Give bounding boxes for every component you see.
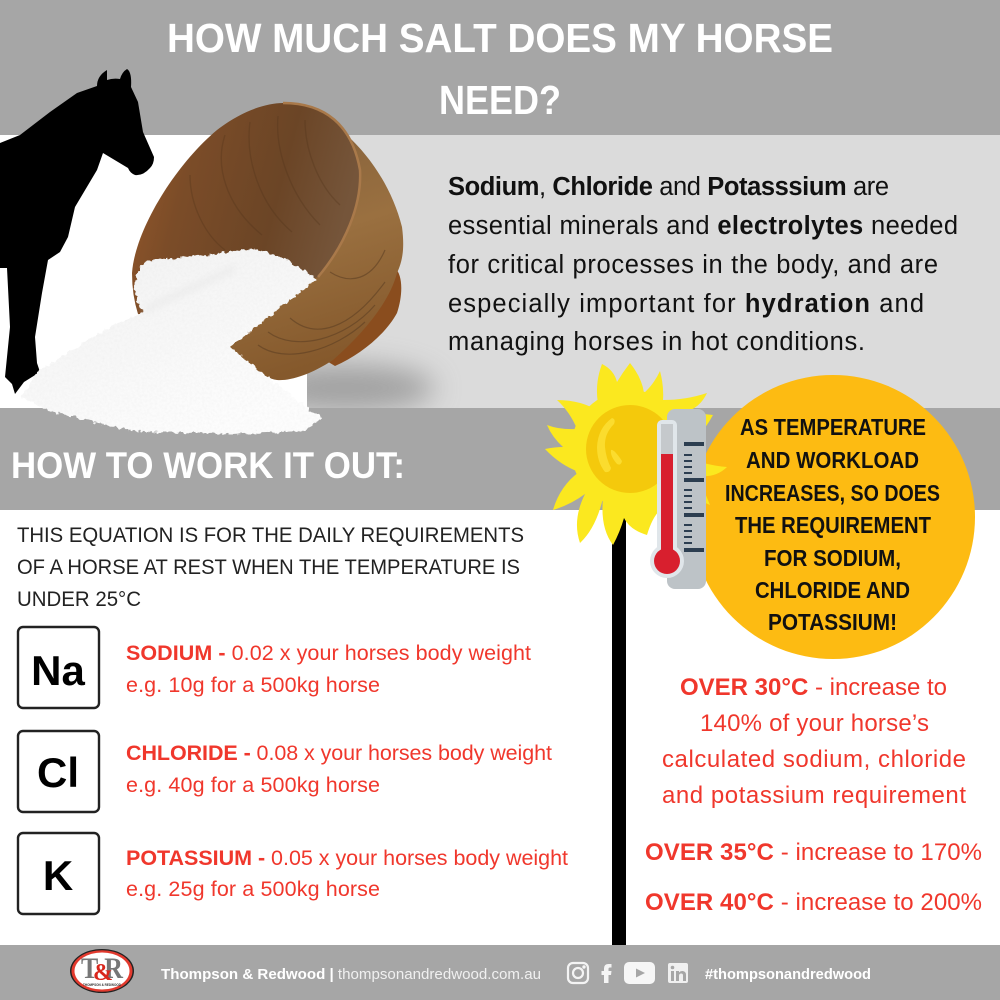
icon: linkedin: [668, 963, 688, 983]
title: HOW MUCH SALT DOES MY HORSE: [167, 15, 833, 61]
sun highlight: [597, 418, 622, 472]
icon: Cl tile: Cl: [37, 749, 79, 796]
footer hashtag: #thompsonandredwood: [705, 966, 871, 983]
thermometer scale: [684, 442, 704, 552]
title: [167, 15, 833, 123]
intro text: [448, 173, 958, 356]
icon: instagram: [568, 963, 588, 983]
temperature guidance text: [645, 674, 982, 916]
icon: Na tile: Na: [31, 647, 85, 694]
bowl interior: [132, 103, 360, 322]
intro text: especially important for hydration and: [448, 290, 924, 318]
intro panel white side: [0, 135, 307, 408]
icon: sun: [545, 363, 727, 545]
bowl rim highlight: [283, 103, 360, 277]
chloride text: CHLORIDE - 0.08 x your horses body weight: [126, 741, 552, 765]
icon: facebook: [602, 964, 612, 983]
intro text: essential minerals and electrolytes needed: [448, 212, 958, 240]
bowl shadow: [255, 364, 435, 412]
intro text: managing horses in hot conditions.: [448, 328, 865, 356]
footer band: [0, 945, 1000, 1000]
salt shading: [145, 268, 235, 310]
footer logo: [70, 949, 134, 993]
intro text: Sodium, Chloride and Potasssium are: [448, 173, 889, 201]
equation description: OF A HORSE AT REST WHEN THE TEMPERATURE IS: [17, 556, 520, 579]
chloride text: [126, 741, 552, 797]
divider line: [612, 510, 626, 945]
intro panel grey side: [307, 135, 1000, 408]
temperature guidance text: OVER 40°C - increase to 200%: [645, 889, 982, 916]
chloride text: e.g. 40g for a 500kg horse: [126, 773, 380, 797]
illustration: wooden bowl and salt: [20, 103, 403, 434]
intro text: for critical processes in the body, and are: [448, 251, 938, 279]
how to work it out band: [0, 408, 1000, 510]
icon: thermometer: [650, 409, 706, 589]
sodium text: SODIUM - 0.02 x your horses body weight: [126, 641, 531, 665]
temperature guidance text: OVER 30°C - increase to: [680, 674, 947, 701]
callout text: AND WORKLOAD: [746, 447, 919, 473]
icon: K tile: [18, 833, 99, 914]
heading: how to work it out: HOW TO WORK IT OUT:: [11, 445, 405, 486]
bowl interior grain: [190, 116, 340, 250]
bowl exterior grain: [258, 250, 385, 354]
callout text: INCREASES, SO DOES: [725, 480, 940, 506]
potassium text: [126, 846, 568, 901]
footer logo: T R: [81, 952, 123, 985]
potassium text: e.g. 25g for a 500kg horse: [126, 877, 380, 901]
temperature guidance text: calculated sodium, chloride: [662, 746, 966, 773]
equation description: UNDER 25°C: [17, 588, 141, 611]
temperature guidance text: OVER 35°C - increase to 170%: [645, 839, 982, 866]
sun disc: [586, 405, 674, 493]
callout text: CHLORIDE AND: [755, 577, 910, 603]
element: sodium: [18, 627, 531, 708]
callout circle: [691, 375, 975, 659]
bowl base: [325, 268, 401, 366]
footer logo: THOMPSON & REDWOOD: [83, 982, 121, 987]
icon: Na tile: [18, 627, 99, 708]
callout text: POTASSIUM!: [768, 609, 897, 635]
icon: Cl tile: [18, 731, 99, 812]
callout text: AS TEMPERATURE: [740, 414, 926, 440]
header band: [0, 0, 1000, 135]
equation description: [17, 524, 524, 611]
equation description: THIS EQUATION IS FOR THE DAILY REQUIREMENTS: [17, 524, 524, 547]
callout text: THE REQUIREMENT: [735, 512, 931, 538]
bowl exterior: [230, 103, 403, 380]
icon: horse silhouette: [0, 69, 154, 394]
callout text: [725, 414, 940, 635]
footer brand text: Thompson & Redwood | thompsonandredwood.com.au: [161, 966, 541, 983]
potassium text: POTASSIUM - 0.05 x your horses body weight: [126, 846, 568, 870]
callout text: FOR SODIUM,: [764, 545, 901, 571]
title: NEED?: [439, 77, 561, 123]
sodium text: e.g. 10g for a 500kg horse: [126, 673, 380, 697]
salt pile: [20, 249, 322, 434]
footer logo: &: [93, 960, 113, 986]
temperature guidance text: and potassium requirement: [662, 782, 966, 809]
element: chloride: [18, 731, 552, 812]
icon: youtube: [624, 962, 655, 984]
element: potassium: [18, 833, 568, 914]
icon: K tile: K: [43, 852, 73, 899]
sodium text: [126, 641, 531, 697]
thermometer tube: [657, 420, 677, 555]
temperature guidance text: 140% of your horse’s: [700, 710, 929, 737]
